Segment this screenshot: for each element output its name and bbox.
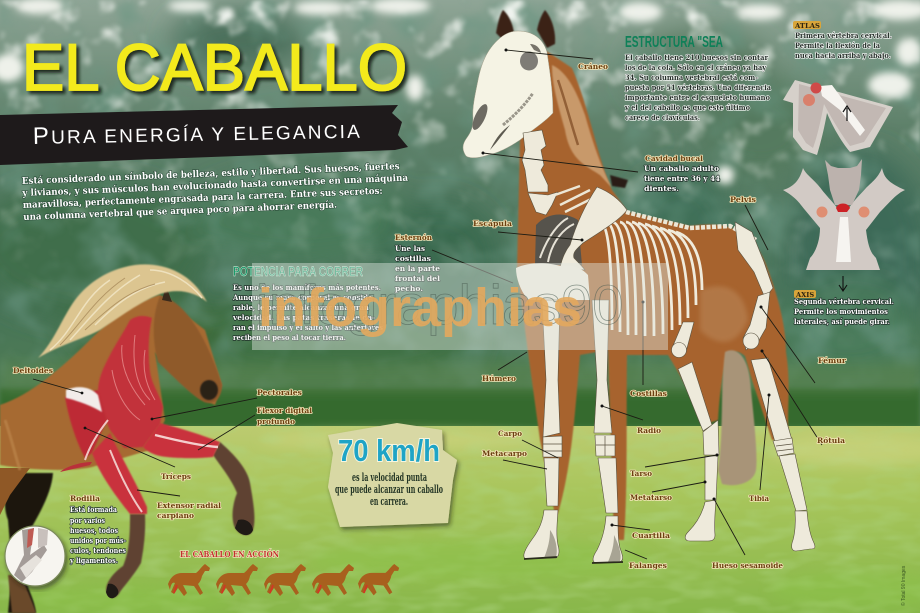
hind leg B bones [751,358,792,442]
panel: el caballo en acción: EL CABALLO EN ACCIÓN [180,549,279,559]
labels: skeleton: Falanges [629,561,667,570]
muscle: neck and chest [98,316,163,448]
muscle: right arm [143,423,220,458]
intro text: maravillosa, perfectamente engrasada para la carrera. Entre sus secretos: [23,186,383,211]
hind leg A bones [672,322,694,352]
labels: skeleton: Hueso sesamoide [712,561,783,570]
forelegs lower [213,442,254,535]
leaders [33,379,82,393]
callout: rodilla: huesos, todos [70,526,118,535]
labels: skeleton: Carpo [498,429,522,438]
callout: esternón [395,233,440,293]
panel: potencia para correr: Es uno de los mamíferos más potentes. [233,283,381,292]
skull [463,31,553,158]
callout: esternón: Esternón [395,233,432,242]
callout: esternón: costillas [395,254,431,263]
diagram: axis [783,159,905,326]
panel: potencia para correr: velocidad. Las patas traseras le da- [232,313,375,322]
panel: potencia para correr: reciben el peso al tocar tierra. [233,333,346,342]
panel: el caballo en acción [168,549,399,596]
panel: potencia para correr: Aunque su masa corporal es conside- [232,293,375,302]
watermark band [252,263,668,350]
horse with muscles (left) [0,264,257,613]
scapula [560,187,627,270]
muscle: shoulder [65,390,107,458]
labels: skeleton: Rótula [817,436,845,445]
dark chest interior [535,215,582,265]
callout: cavidad bucal: Cavidad bucal [645,154,703,163]
labels: skeleton: Radio [637,426,661,435]
labels: muscles: carpiano [157,511,194,520]
diagram: axis: laterales, así puede girar. [794,317,890,326]
tail [718,350,757,485]
callout: esternón: pecho. [395,284,423,293]
callout: rodilla: por varios [70,516,105,525]
pelvis and femur [735,222,773,298]
callout: esternón: en la parte [395,264,440,273]
ears [496,10,514,40]
panel: potencia para correr: ran el impulso y el salto y las anteriores [233,323,383,332]
callout: rodilla: culos, tendones [70,546,126,555]
head [154,296,222,403]
callout: 70 km/h [328,423,457,527]
panel: estructura ósea [624,34,771,122]
diagram: atlas: Primera vértebra cervical. [795,31,892,40]
panel: potencia para correr: POTENCIA PARA CORRER [233,263,363,279]
mane [38,264,207,358]
panel: potencia para correr [232,263,383,342]
intro text: y livianos, y sus músculos han evolucionado hasta convertirse en una máquina [21,173,408,199]
title: EL CABALLO [22,30,407,104]
panel: estructura ósea: y el del caballo es que este último [624,103,750,112]
panel: estructura ósea: carece de clavículas. [625,113,700,122]
labels: muscles: Deltoides [13,366,53,375]
subtitle banner: PURA ENERGÍA Y ELEGANCIA [33,117,360,150]
panel: estructura ósea: ESTRUCTURA "SEA [625,34,723,51]
muscle: left arm [92,433,147,514]
labels: skeleton: Metacarpo [482,449,527,458]
labels: skeleton [473,62,847,570]
diagram: axis: Segunda vértebra cervical. [794,297,894,306]
callout: 70 km/h: es la velocidad punta [352,471,427,484]
spine [626,212,756,240]
panel: estructura ósea: los de la cola. Sólo en el cráneo ya hay [625,63,766,72]
callout: rodilla: Rodilla [70,494,100,503]
labels: skeleton: Cráneo [578,62,608,71]
diagram: atlas: nuca hacia arriba y abajo. [795,51,891,60]
labels: skeleton: Escápula [473,219,512,228]
panel: estructura ósea: 34. Su columna vertebral está com- [625,73,758,82]
ribs [555,186,702,336]
neck vertebrae [522,130,548,192]
leader lines: skeleton [432,48,822,559]
intro text [21,161,409,223]
labels: skeleton: Pelvis [730,195,756,204]
front leg B bones [592,300,612,433]
subtitle banner [0,105,408,165]
labels: muscles: Flexor digital [257,406,312,415]
hip shading [700,286,748,342]
labels: muscles: Extensor radial [157,501,221,510]
watermark text: infographias [258,278,582,338]
labels: muscles [13,366,312,520]
labels: muscles: Pectorales [257,388,302,397]
callout: cavidad bucal: Un caballo adulto [644,164,719,173]
diagram: atlas: ATLAS [794,22,820,30]
labels: muscles: profundo [257,417,295,426]
callout: esternón: Une las [395,244,425,253]
diagram: atlas [783,21,893,155]
intro text: Está considerado un símbolo de belleza, estilo y libertad. Sus huesos, fuertes [22,161,400,187]
callout: cavidad bucal: dientes. [644,184,679,193]
labels: skeleton: Costillas [630,389,667,398]
panel: estructura ósea: El caballo tiene 210 huesos sin contar [625,53,769,62]
callout: esternón: frontal del [395,274,440,283]
horse body silhouette [517,50,790,540]
body [0,295,222,470]
callout: 70 km/h: 70 km/h [338,433,440,468]
shoulder mass [516,263,590,300]
callout: rodilla: unidos por mús- [70,536,126,545]
labels: skeleton: Tarso [630,469,652,478]
diagram: axis: AXIS [795,291,814,299]
panel: estructura ósea: importante entre el esqueleto humano [625,93,770,102]
panel: potencia para correr: rable, le permite alcanzar una gran [233,303,369,312]
labels: skeleton: Cuartilla [632,531,670,540]
callout: rodilla [69,494,126,565]
intro text: una columna vertebral que se arquea poco para ahorrar energía. [23,200,337,223]
credit: © Total 90 Images [900,565,907,606]
labels: skeleton: Tibia [749,494,769,503]
labels: skeleton: Metatarso [630,493,672,502]
labels: skeleton: Húmero [482,374,516,383]
hedge [0,388,920,427]
diagram: atlas: Permite la flexión de la [795,41,880,50]
hind leg [5,473,53,613]
labels: skeleton: Fémur [818,356,847,365]
icon: knee detail circle [5,526,65,586]
diagram: axis: Permite los movimientos [794,307,888,316]
callout: 70 km/h: que puede alcanzar un caballo [335,483,443,496]
callout: rodilla: y ligamentos. [69,556,118,565]
front leg A bones [542,300,560,437]
callout: cavidad bucal [644,154,720,193]
callout: rodilla: Está formada [70,505,117,514]
panel: estructura ósea: puesta por 51 vértebras. Una diferencia [625,83,771,92]
watermark text: infographias90 [256,273,623,336]
main horse [463,10,815,563]
callout: cavidad bucal: tiene entre 36 y 44 [644,174,720,183]
callout: 70 km/h: en carrera. [370,495,408,508]
labels: muscles: Tríceps [161,472,191,481]
mane on neck [552,65,612,188]
deltoid tendon [66,387,102,412]
